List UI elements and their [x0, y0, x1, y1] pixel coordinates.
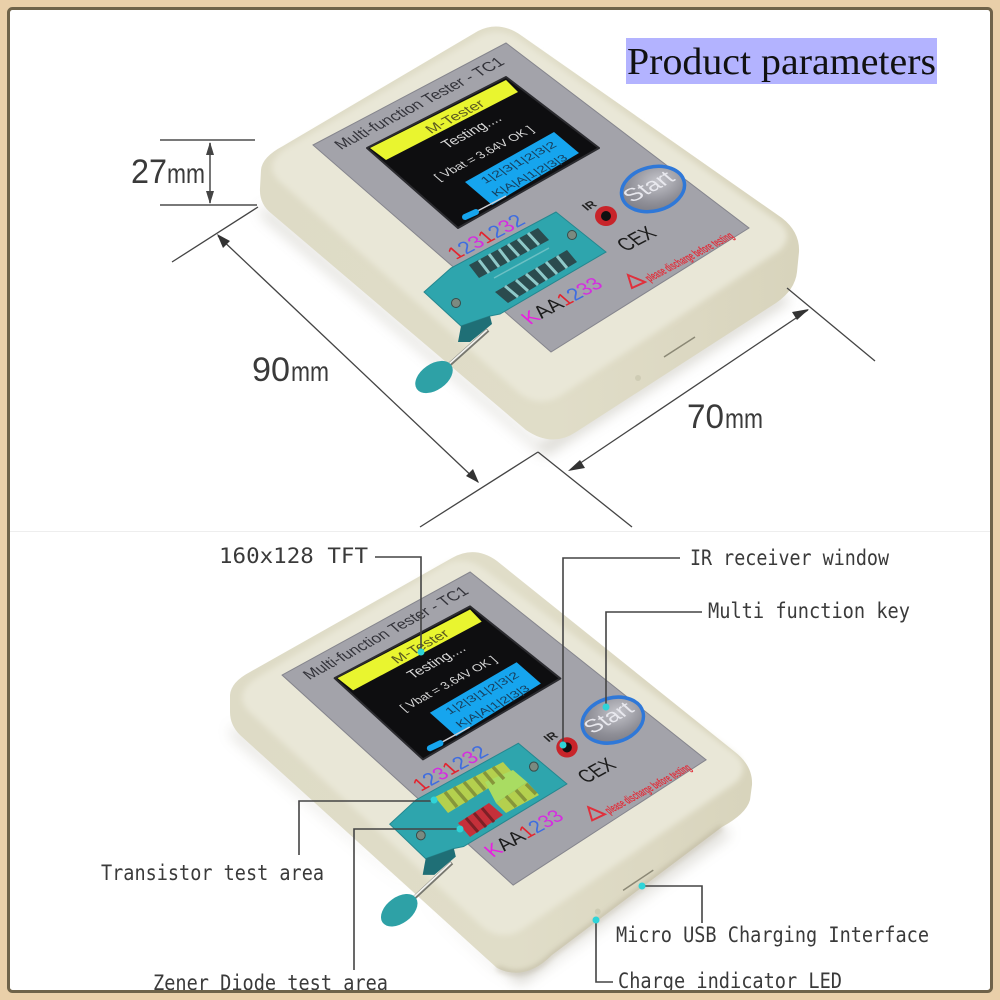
- callout: multi function key: [602, 599, 910, 710]
- bottom device shadow: [232, 725, 730, 985]
- bottom device lower edge shading: [497, 827, 722, 973]
- callout: zener test area: Zener Diode test area: [153, 971, 388, 995]
- dimension 90mm: [172, 207, 538, 527]
- callout: IR: [560, 546, 889, 748]
- callout: zener test area: [153, 826, 464, 995]
- dimension 70mm: 70: [687, 398, 724, 436]
- device: top view with dimensions: [260, 27, 799, 455]
- pin text lines: K|A|A|1|2|3|3: [489, 153, 571, 199]
- grey face panel: [313, 43, 749, 352]
- bottom testing text: Testing....: [404, 642, 469, 681]
- bottom screen: [334, 606, 561, 760]
- title on panel: Multi-function Tester - TC1: [331, 55, 509, 153]
- bottom pin text lines: K|A|A|1|2|3|3: [453, 683, 533, 730]
- ZIF slots: [469, 228, 577, 303]
- blue pin box: [465, 132, 579, 205]
- testing text: Testing....: [437, 111, 505, 151]
- start button: [617, 160, 689, 218]
- bottom ZIF screws: [416, 762, 538, 840]
- battery text: [ Vbat = 3.64V OK ]: [431, 124, 537, 183]
- bottom pin numbers upper: 1231232: [408, 742, 494, 795]
- warning: [628, 229, 737, 288]
- bottom USB slot: [623, 870, 653, 890]
- progress bar: [465, 196, 506, 217]
- bottom lever knob: [375, 887, 423, 933]
- ZIF screws: [452, 230, 576, 308]
- header text: M-Tester: [421, 96, 488, 136]
- lever stem: [458, 316, 492, 342]
- bottom progress bar: [430, 727, 470, 748]
- bottom device body: [230, 552, 752, 973]
- callout: micro USB: [616, 882, 929, 947]
- callout: TFT: 160x128 TFT: [219, 544, 368, 568]
- bottom screen header: [338, 609, 482, 691]
- bottom pin text lines: 1|2|3|1|2|3|2: [443, 670, 522, 717]
- bottom title on panel: Multi-function Tester - TC1: [300, 584, 473, 683]
- transistor test area highlight: [435, 762, 539, 813]
- device body: [260, 27, 799, 440]
- zener test area highlight: [458, 803, 503, 837]
- bottom grey face panel: [282, 572, 707, 885]
- IR socket: [595, 206, 617, 226]
- callout: TFT: [219, 544, 424, 656]
- callout: multi function key: Multi function key: [708, 599, 910, 623]
- product parameters heading: Product parameters: [627, 41, 936, 83]
- bottom warning: [588, 761, 695, 821]
- warning: please discharge before testing: [641, 229, 737, 284]
- pin text lines: 1|2|3|1|2|3|2: [478, 140, 560, 186]
- bottom warning: please discharge before testing: [601, 761, 695, 816]
- lever knob: [409, 354, 459, 400]
- device top face: [272, 32, 787, 402]
- bottom IR label: IR: [540, 729, 561, 744]
- bottom LED: [595, 909, 601, 915]
- callout: transistor test area: [101, 796, 438, 885]
- USB slot: [664, 337, 695, 357]
- callout: transistor test area: Transistor test area: [101, 861, 324, 885]
- bottom device top face: [242, 560, 744, 936]
- callout: micro USB: Micro USB Charging Interface: [616, 923, 929, 947]
- pin text lines: [478, 140, 571, 199]
- bottom ZIF socket plate: [390, 743, 567, 859]
- bottom pin numbers lower: KAA1233: [479, 806, 569, 861]
- bottom start button: [577, 691, 648, 750]
- dimension 70mm: mm: [725, 403, 763, 434]
- pin numbers lower: KAA1233: [516, 274, 608, 328]
- LED: [635, 375, 641, 381]
- callout: charge LED: [592, 916, 842, 993]
- dimension 90mm: 90: [252, 351, 290, 389]
- callout: IR: IR receiver window: [690, 546, 889, 570]
- dimension 27mm: mm: [167, 158, 205, 189]
- bottom start label: Start: [577, 697, 639, 738]
- screen: [367, 77, 599, 228]
- callout: charge LED: Charge indicator LED: [618, 969, 842, 993]
- pin numbers upper: 1231232: [442, 211, 531, 263]
- bottom battery text: [ Vbat = 3.64V OK ]: [396, 654, 500, 714]
- bottom lever rod: [414, 863, 452, 898]
- bottom lever stem: [423, 848, 456, 875]
- lever rod: [449, 330, 488, 365]
- IR label: IR: [579, 198, 600, 213]
- screen header: [370, 80, 518, 160]
- bottom pin text lines: [443, 670, 533, 730]
- bottom blue pin box: [430, 662, 541, 736]
- ZIF socket plate: [424, 212, 606, 326]
- bottom header text: M-Tester: [388, 627, 453, 666]
- dimension 27mm: 27: [131, 153, 167, 191]
- dimension 27mm: [131, 140, 257, 205]
- bottom IR socket: [556, 737, 578, 758]
- start label: Start: [617, 167, 680, 206]
- dimension 90mm: mm: [291, 356, 329, 387]
- device: bottom view with callouts: [242, 560, 744, 936]
- bottom CE mark: CEX: [572, 753, 621, 787]
- CE mark: CEX: [611, 222, 662, 255]
- dimension 70mm: [538, 288, 875, 527]
- device shadow: [262, 205, 790, 455]
